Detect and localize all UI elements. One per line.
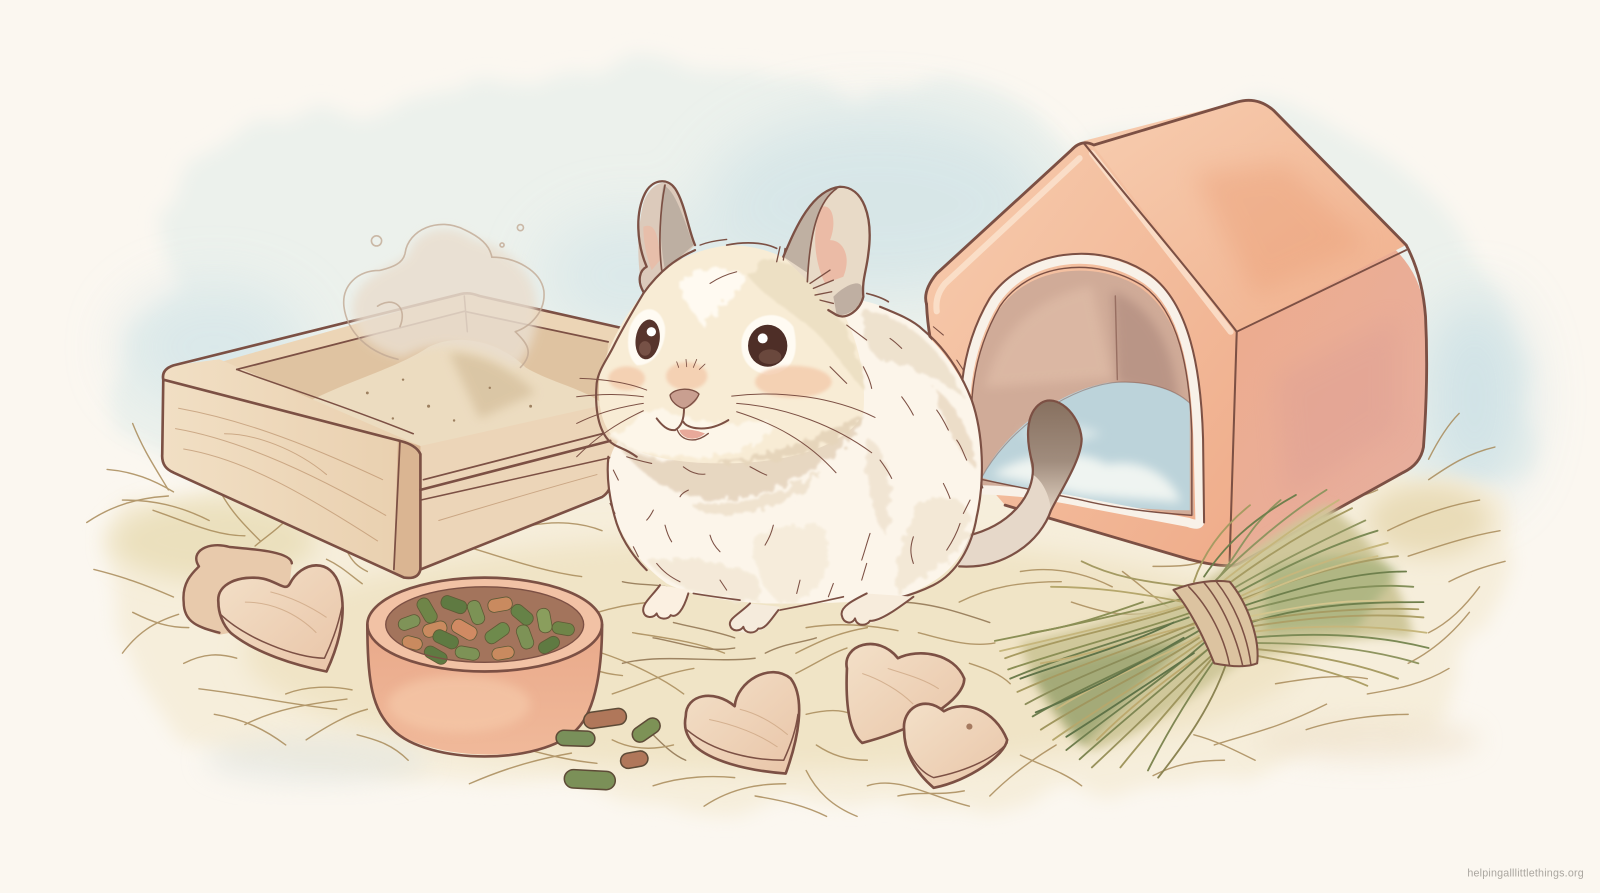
fur ticks (610, 272, 970, 597)
tail (959, 400, 1082, 567)
whiskers (577, 378, 875, 473)
heart treat centre (685, 672, 799, 774)
left ear (638, 181, 695, 292)
cheek blush (608, 362, 832, 398)
roof wash (1194, 163, 1398, 500)
watermark: helpingalllittlethings.org (1467, 868, 1584, 880)
ground wash (100, 469, 1509, 809)
heart treat (218, 565, 343, 672)
bowl interior (386, 587, 584, 662)
watercolor sky wash (115, 58, 1528, 551)
right ear (777, 187, 870, 316)
treats left stack (183, 545, 343, 672)
dust cloud (344, 224, 544, 367)
pellets (397, 594, 575, 667)
hay strands on the ground (87, 413, 1505, 816)
body outline (608, 293, 982, 610)
head markings (610, 261, 863, 464)
hind paw (842, 593, 913, 625)
right eye (748, 325, 787, 367)
hamster (577, 181, 982, 633)
left eye (633, 318, 662, 361)
sand pile (311, 340, 602, 480)
box back walls (219, 293, 624, 480)
house roof (1084, 100, 1406, 332)
eye patches (628, 309, 796, 375)
hay stalks (995, 490, 1429, 778)
food bowl (367, 578, 602, 756)
hay bundle (995, 490, 1429, 778)
house outline (926, 100, 1427, 566)
box interior (237, 311, 608, 464)
hay twine (1173, 581, 1258, 666)
heart treat small (904, 704, 1007, 788)
sky wash darker area (122, 112, 1526, 500)
head outline (596, 239, 777, 457)
head (599, 245, 864, 463)
bundle mass (1020, 505, 1413, 750)
cushion (982, 382, 1190, 510)
door interior (971, 271, 1194, 515)
wood grain (176, 408, 597, 541)
door arch rim (965, 259, 1200, 524)
bowl rim (367, 578, 602, 672)
wooden treat block (183, 545, 292, 635)
box left wall (162, 359, 420, 578)
house side wall (1219, 250, 1426, 568)
body (608, 300, 981, 603)
box front right wall (404, 402, 623, 578)
nose and mouth (657, 359, 728, 440)
body fur shading (617, 310, 977, 603)
box end cap (394, 439, 420, 578)
front-right paw (730, 603, 780, 633)
sand box (162, 293, 624, 578)
house edge highlight (936, 153, 1231, 332)
house (926, 100, 1427, 568)
heart treat right (846, 644, 964, 743)
spilled pellets (556, 707, 663, 790)
bowl body (367, 625, 602, 755)
house front face (926, 142, 1237, 567)
front-left paw (643, 585, 690, 619)
